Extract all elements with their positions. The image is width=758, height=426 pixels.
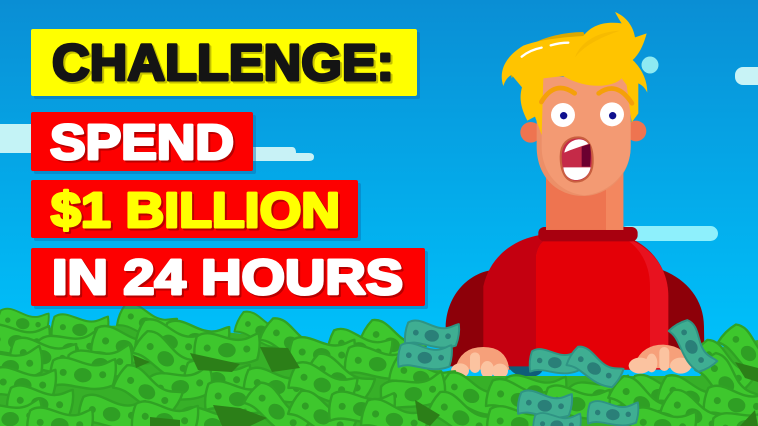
- money pile: [0, 298, 758, 426]
- dark gaps: [133, 347, 758, 426]
- shadow under bills: [508, 366, 543, 377]
- pile base: [0, 325, 758, 426]
- torso centre: [536, 240, 650, 370]
- red banner: time limit: IN 24 HOURS: [52, 251, 403, 305]
- eyes: [551, 102, 624, 127]
- hair quiff shade: [575, 31, 620, 57]
- character: head: [502, 12, 647, 230]
- neck: [546, 167, 623, 230]
- red banner: amount: $1 BILLION: [51, 184, 340, 238]
- arms: [446, 270, 705, 366]
- collar: [538, 227, 638, 241]
- torso highlight: [536, 240, 668, 370]
- red banner: time limit: [31, 248, 428, 309]
- ears: [520, 121, 646, 143]
- red banner: spend: SPEND: [50, 116, 234, 170]
- torso: [483, 235, 668, 370]
- yellow challenge banner: [31, 29, 420, 99]
- red banner: spend: [31, 112, 256, 174]
- hair rim: [511, 32, 588, 78]
- character: body: [446, 227, 705, 378]
- clouds: [0, 56, 758, 241]
- hair: [502, 12, 647, 135]
- mouth: [561, 137, 593, 182]
- hair highlights: [522, 43, 568, 57]
- eyebrows: [541, 88, 632, 103]
- right hand: [629, 345, 692, 374]
- teal bills: [397, 316, 718, 426]
- face: [537, 77, 631, 196]
- left hand: [451, 347, 509, 378]
- yellow challenge banner: CHALLENGE:: [52, 34, 394, 91]
